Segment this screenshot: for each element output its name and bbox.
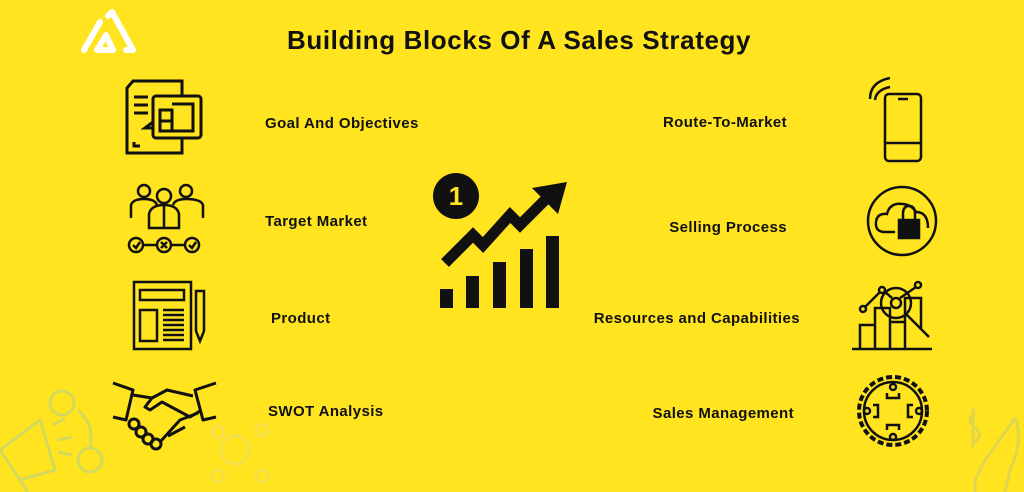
text: goal and objectives: Goal And Objectives [265,115,419,132]
text: resources and capabilities: Resources and Capabilities [594,310,800,327]
text: product: Product [271,310,330,327]
title: Building Blocks Of A Sales Strategy [287,25,751,55]
text: sales management: Sales Management [653,405,794,422]
central chart icon: 1 [449,181,463,211]
text: route-to-market: Route-To-Market [663,114,787,131]
text: target market: Target Market [265,213,367,230]
text: swot analysis: SWOT Analysis [268,403,384,420]
text: selling process: Selling Process [669,219,787,236]
decorative money hand faded [970,408,1019,492]
decorative megaphone faded [0,391,102,492]
decorative network faded [212,424,268,482]
